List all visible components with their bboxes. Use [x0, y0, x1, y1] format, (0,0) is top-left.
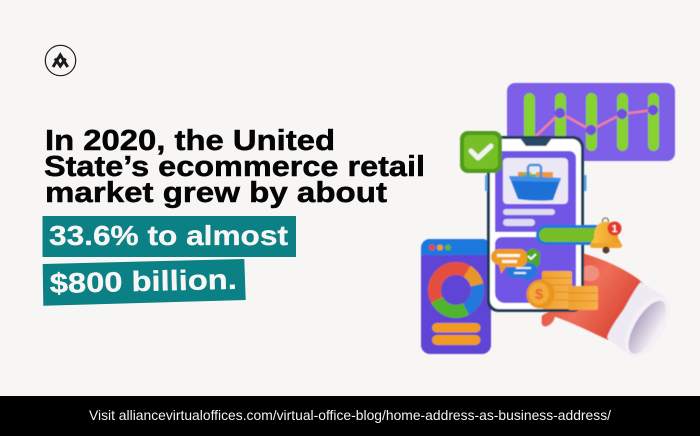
shirt cuff — [607, 282, 679, 364]
highlight: 33.6% to almost: 33.6% to almost — [49, 220, 288, 251]
heading: market grew by about — [45, 177, 387, 209]
footer bar: Visit alliancevirtualoffices.com/virtual-office-blog/home-address-as-business-address/ — [89, 407, 611, 423]
highlight: $800 billion.: $800 billion. — [49, 264, 237, 299]
panel: dashboard card with donut — [421, 239, 491, 354]
progress pill — [536, 225, 608, 245]
icon: chat bubbles and shield — [491, 248, 540, 282]
donut chart — [434, 268, 478, 312]
heading — [44, 125, 425, 209]
panel: messages card — [495, 237, 576, 303]
icon: shopping basket — [509, 165, 561, 201]
panel: line chart card — [507, 83, 675, 161]
logo — [45, 45, 76, 76]
icon: green check badge — [460, 131, 502, 173]
panel: product card — [495, 151, 576, 232]
icon: notification bell — [590, 218, 622, 254]
highlight: 33.6% to almost — [42, 216, 296, 257]
heading: In 2020, the United — [45, 125, 335, 157]
footer bar — [0, 396, 700, 436]
highlight: $800 billion. — [43, 259, 246, 306]
icon: coin stacks: $ — [535, 286, 544, 303]
phone — [485, 136, 586, 312]
hand — [542, 253, 643, 340]
icon: notification bell: 1 — [612, 224, 618, 235]
illustration: ecommerce phone held by hand — [421, 83, 679, 364]
icon: coin stacks — [522, 271, 598, 312]
heading: State’s ecommerce retail — [44, 151, 425, 183]
